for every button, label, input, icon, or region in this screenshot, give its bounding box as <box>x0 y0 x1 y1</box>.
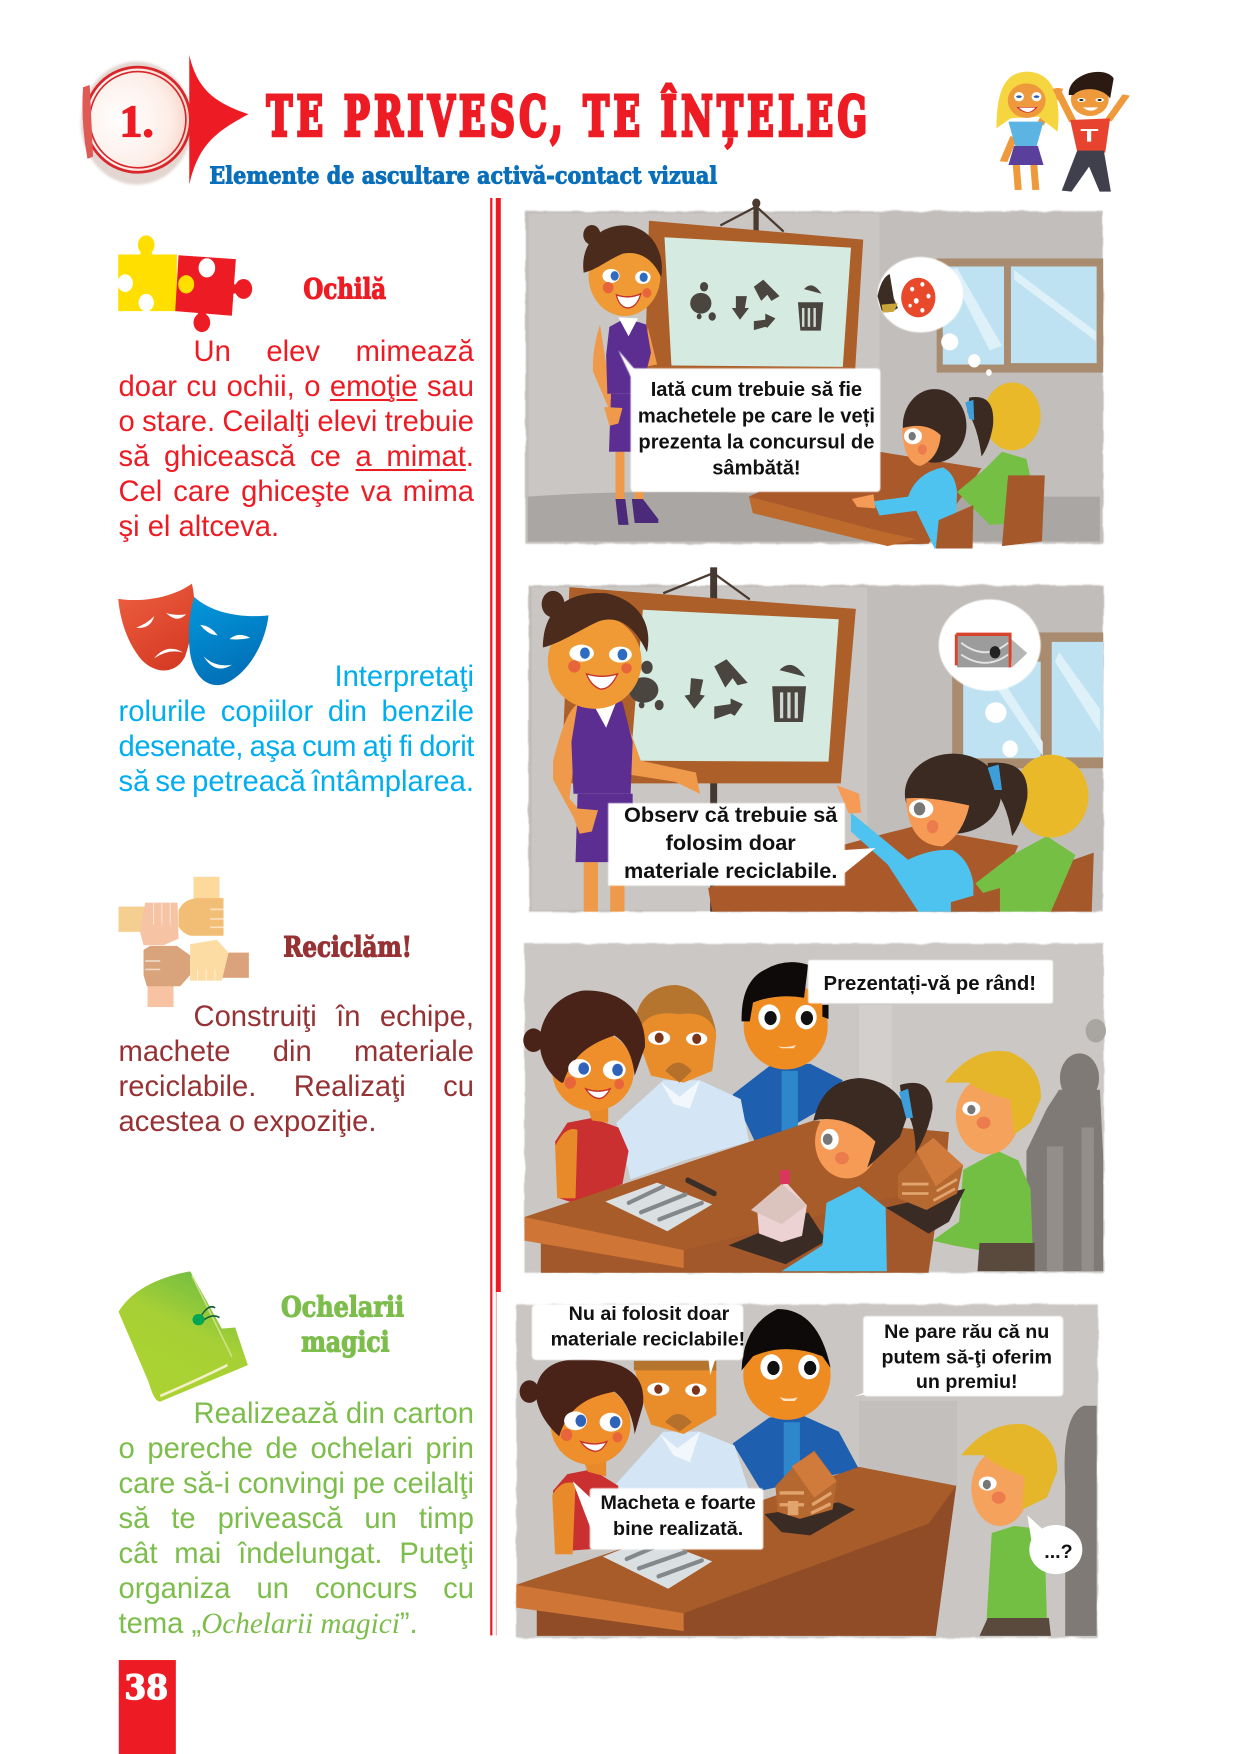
speech text: Ne pare rău: putem să-ţi oferim <box>881 1347 1052 1369</box>
speech text: student: Observ că trebuie să <box>624 802 838 827</box>
text block: magic glasses instructions: tema „Ochelarii magici”. <box>118 1608 418 1640</box>
text block: recycling instructions: reciclabile. Realizaţi cu <box>118 1071 474 1103</box>
speech text: teacher: sâmbătă! <box>712 457 801 479</box>
text block: magic glasses instructions: cât mai îndelungat. Puteţi <box>118 1538 474 1570</box>
text block: magic glasses instructions <box>118 1398 474 1640</box>
heading: Ochelarii magici: magici <box>301 1325 390 1358</box>
speech text: Nu ai folosit doar: Nu ai folosit doar <box>569 1303 730 1325</box>
speech text: Ne pare rău <box>881 1321 1052 1393</box>
speech text: teacher <box>638 379 875 479</box>
heading: Ochelarii magici: Ochelarii <box>281 1291 404 1324</box>
numbered sticker badge: 1. <box>119 95 154 146</box>
heading: Ochelarii magici <box>281 1291 404 1358</box>
text block: Ochilă instructions: o stare. Ceilalţi elevi trebuie <box>118 406 474 438</box>
red arrow shape <box>189 55 249 185</box>
speech text: Macheta: bine realizată. <box>613 1518 743 1540</box>
text block: role play instructions <box>118 661 474 798</box>
speech text: teacher: Iată cum trebuie să fie <box>651 379 862 401</box>
text block: Ochilă instructions: şi el altceva. <box>118 511 279 543</box>
panel: comic 1, teacher presents the poster <box>525 199 1103 548</box>
icon: two children mascots <box>997 72 1126 192</box>
page number tab: 38 <box>124 1667 168 1707</box>
speech text: student: materiale reciclabile. <box>624 858 837 883</box>
text block: role play instructions: rolurile copiilor din benzile <box>118 696 474 728</box>
panel: comic 2, student answers <box>529 567 1103 912</box>
speech text: jury member: Prezentați-vă pe rând! <box>824 973 1036 995</box>
vertical red double rule <box>490 198 501 1635</box>
speech text: student: folosim doar <box>666 830 796 855</box>
speech text: Ne pare rău: Ne pare rău că nu <box>884 1321 1049 1343</box>
speech text: Nu ai folosit doar <box>551 1303 745 1351</box>
icon: puzzle pieces <box>118 235 252 332</box>
panel: comic 4, jury verdict <box>516 1303 1098 1638</box>
text block: magic glasses instructions: o pereche de ochelari prin <box>118 1433 474 1465</box>
panel: comic 3, team presents models to the jury <box>523 944 1106 1273</box>
text block: magic glasses instructions: să te privească un timp <box>118 1503 474 1535</box>
heading: Reciclăm!: Reciclăm! <box>283 930 412 963</box>
text block: recycling instructions: machete din materiale <box>118 1036 474 1068</box>
icon: theatre masks <box>118 584 269 685</box>
text block: recycling instructions <box>118 1001 474 1138</box>
subtitle: Elemente de ascultare activă-contact vizual <box>209 161 717 189</box>
page number tab <box>119 1660 176 1754</box>
text block: Ochilă instructions: doar cu ochii, o emoţie sau <box>118 371 474 403</box>
speech text: Ne pare rău: un premiu! <box>916 1371 1018 1393</box>
speech text: student <box>624 802 838 883</box>
text block: magic glasses instructions: organiza un concurs cu <box>118 1573 474 1605</box>
text block: magic glasses instructions: Realizează din carton <box>194 1398 474 1430</box>
text block: magic glasses instructions: care să-i convingi pe ceilalţi <box>118 1468 474 1500</box>
speech text: teacher: machetele pe care le veți <box>638 405 875 427</box>
text block: role play instructions: să se petreacă întâmplarea. <box>118 766 474 798</box>
text block: recycling instructions: acestea o expoziţie. <box>118 1106 376 1138</box>
text block: Ochilă instructions: să ghicească ce a mimat. <box>118 441 474 473</box>
text block: Ochilă instructions: Cel care ghiceşte va mima <box>118 476 474 508</box>
title: TE PRIVESC, TE ÎNȚELEG <box>266 83 867 149</box>
speech text: Macheta <box>600 1492 756 1540</box>
numbered sticker badge <box>81 62 193 185</box>
speech text: Nu ai folosit doar: materiale reciclabile! <box>551 1329 745 1351</box>
text block: Ochilă instructions: Un elev mimează <box>194 336 474 368</box>
text block: role play instructions: Interpretaţi <box>334 661 474 693</box>
heading: Ochilă: Ochilă <box>303 273 386 306</box>
text block: recycling instructions: Construiţi în echipe, <box>194 1001 474 1033</box>
text block: role play instructions: desenate, aşa cum aţi fi dorit <box>118 731 474 763</box>
icon: clasped hands <box>119 877 249 1007</box>
speech text: Macheta: Macheta e foarte <box>600 1492 756 1514</box>
icon: green folder <box>119 1271 248 1402</box>
speech text: teacher: prezenta la concursul de <box>638 432 874 454</box>
speech text: boy question: ...? <box>1044 1541 1073 1563</box>
text block: Ochilă instructions <box>118 336 474 543</box>
